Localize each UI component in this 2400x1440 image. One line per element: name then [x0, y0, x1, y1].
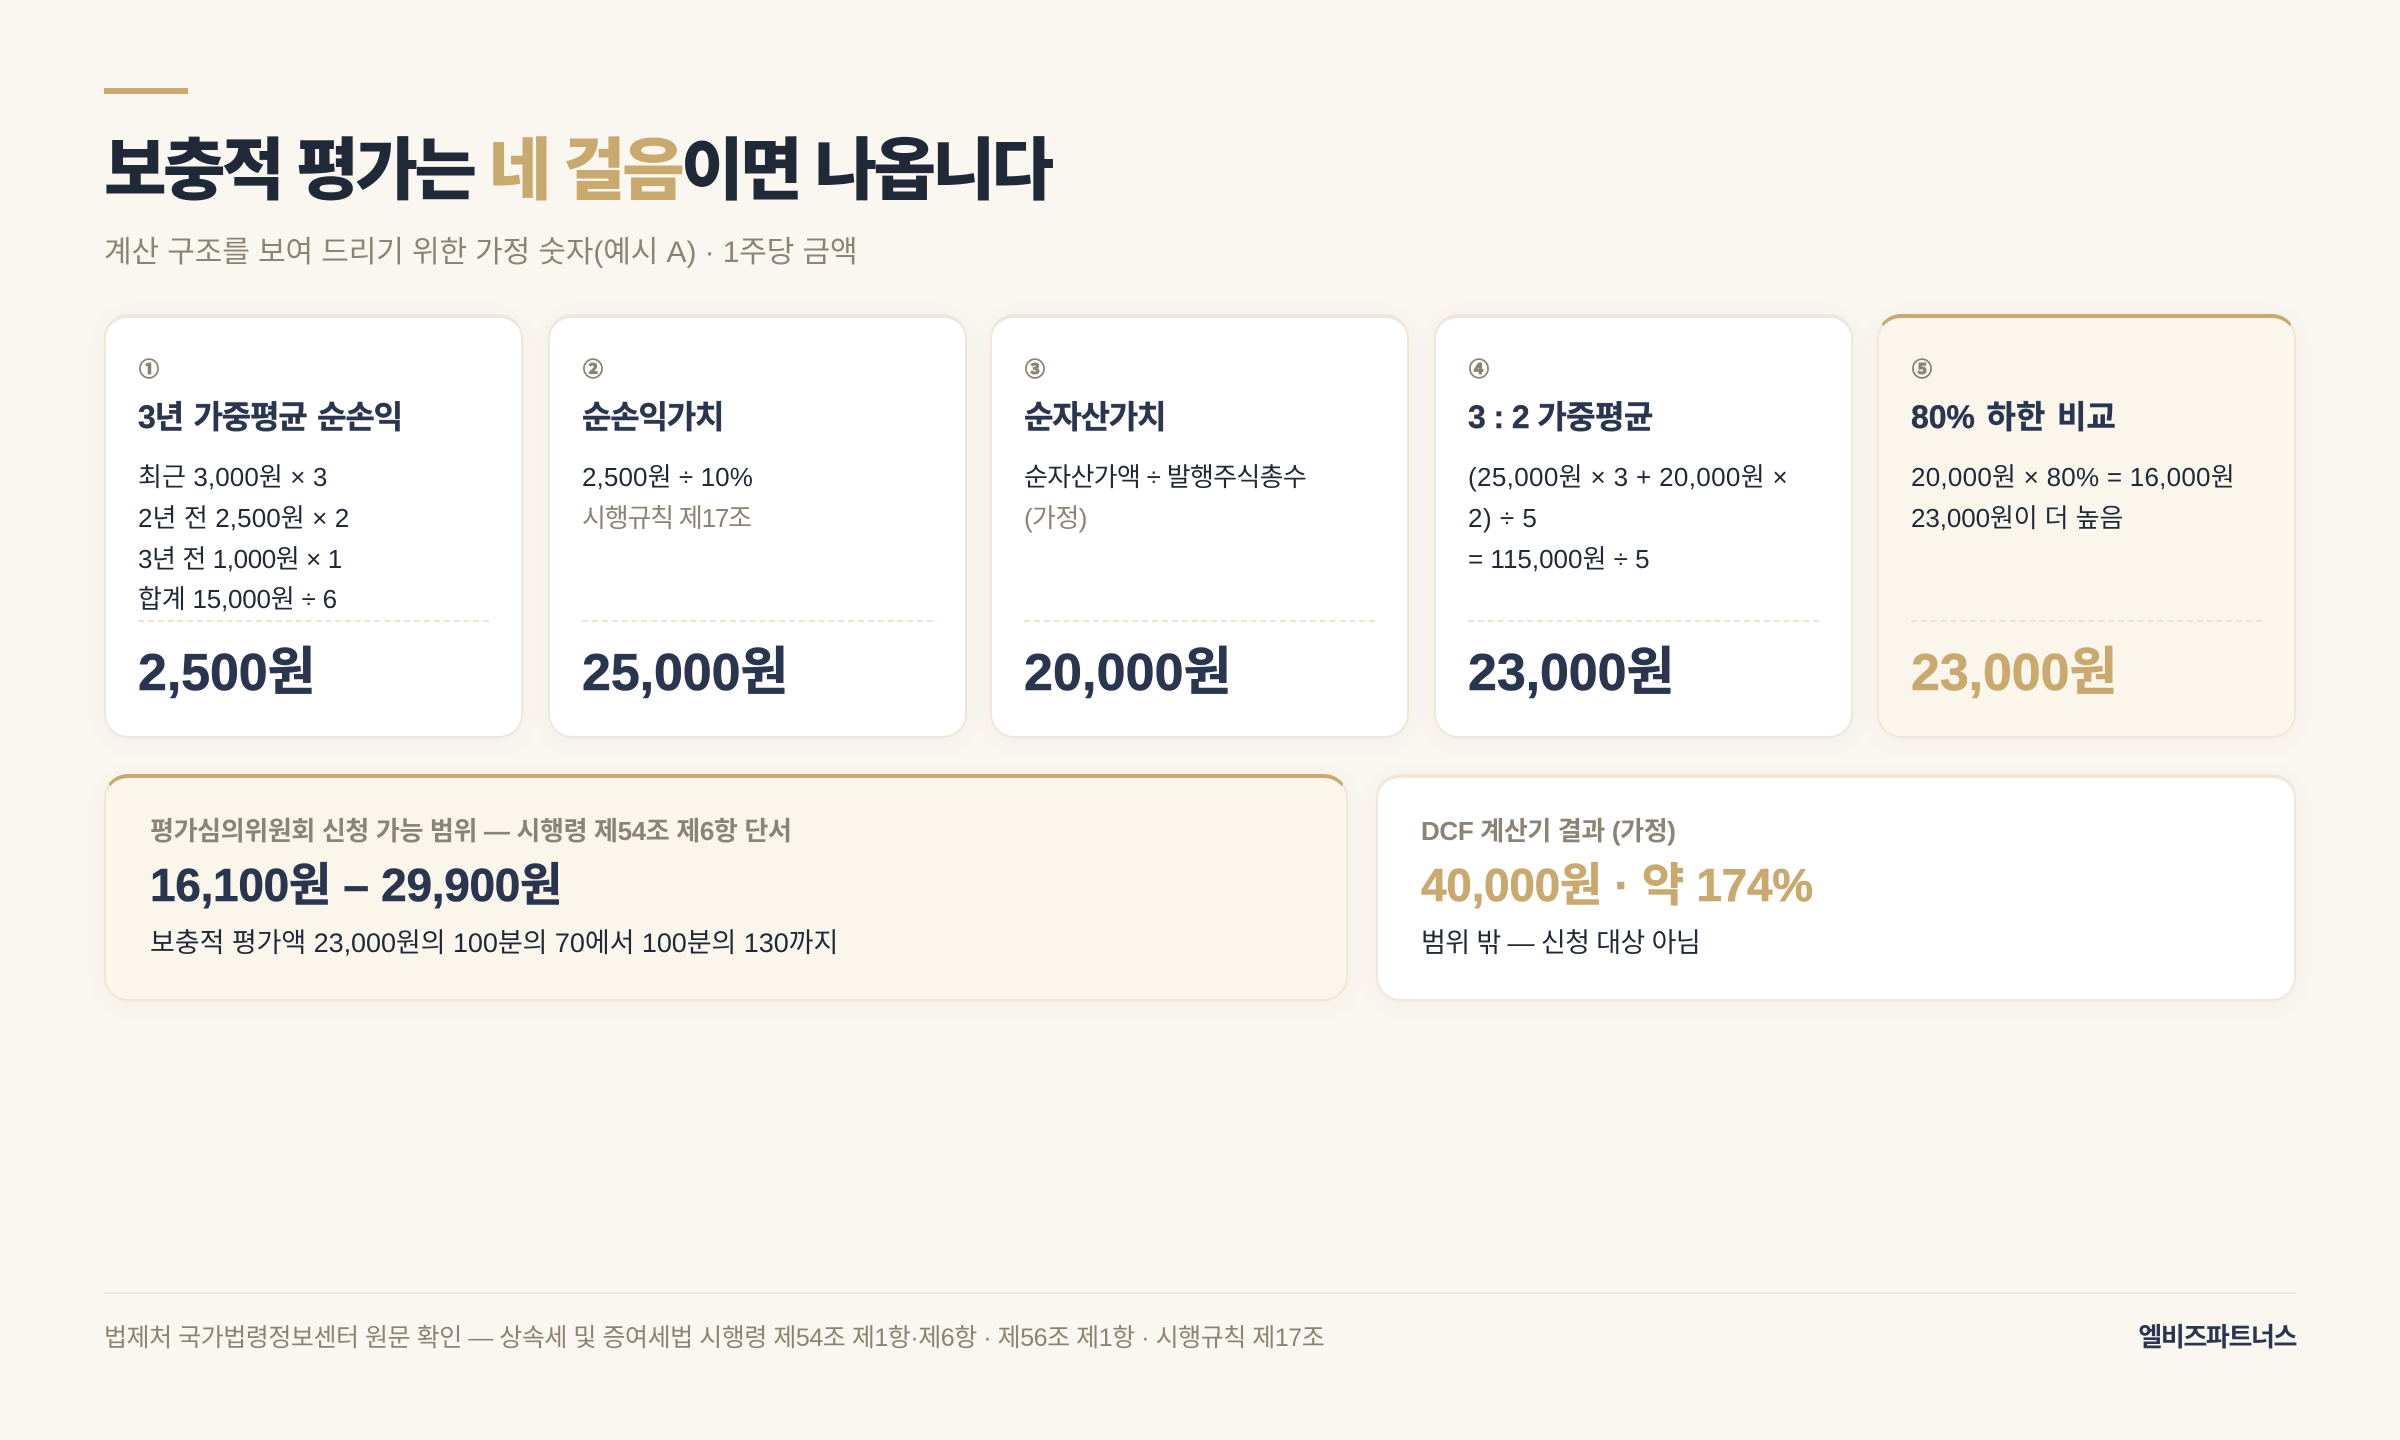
step 4 formula — [1468, 462, 1788, 574]
panel: DCF result — [1376, 774, 2296, 1001]
step 4 heading: 3 : 2 가중평균 — [1468, 399, 1653, 435]
step 3 result: 20,000원 — [1024, 644, 1232, 702]
step 2 result: 25,000원 — [582, 644, 788, 702]
range value: 16,100원 – 29,900원 — [150, 859, 562, 911]
step 5 heading: 80% 하한 비교 — [1911, 399, 2116, 435]
step 1 result: 2,500원 — [138, 644, 315, 702]
accent bar — [104, 88, 188, 94]
step number 1: ① — [139, 359, 159, 381]
panel: step 1 — [104, 314, 523, 738]
step 2 formula — [582, 462, 753, 533]
step 4 result: 23,000원 — [1468, 644, 1674, 702]
panel: step 2 — [548, 314, 967, 738]
panel: step 4 — [1434, 314, 1853, 738]
step 2 formula: 시행규칙 제17조 — [582, 503, 751, 533]
DCF value: 40,000원 · 약 174% — [1421, 859, 1813, 911]
step 2 formula: 2,500원 ÷ 10% — [582, 462, 753, 492]
step 1 formula — [138, 462, 349, 614]
step 3 heading: 순자산가치 — [1024, 399, 1165, 435]
step 4 formula: (25,000원 × 3 + 20,000원 × — [1468, 462, 1788, 492]
range description: 보충적 평가액 23,000원의 100분의 70에서 100분의 130까지 — [150, 928, 838, 958]
step 5 formula: 23,000원이 더 높음 — [1911, 503, 2123, 533]
step number 2: ② — [583, 359, 603, 381]
panel: step 5 — [1877, 314, 2296, 738]
step number 3: ③ — [1025, 359, 1045, 381]
step 1 formula: 최근 3,000원 × 3 — [138, 462, 327, 492]
step 1 formula: 합계 15,000원 ÷ 6 — [138, 584, 337, 614]
step 5 formula — [1911, 462, 2235, 533]
title: 보충적 평가는 네 걸음이면 나옵니다 — [104, 133, 1051, 209]
panel: step 3 — [990, 314, 1409, 738]
DCF description: 범위 밖 — 신청 대상 아님 — [1421, 928, 1700, 958]
step 4 formula: 2) ÷ 5 — [1468, 503, 1537, 533]
step 5 formula: 20,000원 × 80% = 16,000원 — [1911, 462, 2235, 492]
subtitle: 계산 구조를 보여 드리기 위한 가정 숫자(예시 A) · 1주당 금액 — [104, 236, 858, 269]
step 5 result: 23,000원 — [1911, 644, 2117, 702]
step 1 formula: 3년 전 1,000원 × 1 — [138, 544, 342, 574]
step 3 formula: (가정) — [1024, 503, 1087, 533]
footer brand: 엘비즈파트너스 — [2138, 1322, 2296, 1352]
panel: application range — [104, 774, 1348, 1001]
step 2 heading: 순손익가치 — [582, 399, 723, 435]
step number 5: ⑤ — [1912, 359, 1932, 381]
step 1 formula: 2년 전 2,500원 × 2 — [138, 503, 349, 533]
step 1 heading: 3년 가중평균 순손익 — [138, 399, 402, 435]
range label: 평가심의위원회 신청 가능 범위 — 시행령 제54조 제6항 단서 — [150, 816, 792, 846]
step number 4: ④ — [1469, 359, 1489, 381]
step 4 formula: = 115,000원 ÷ 5 — [1468, 544, 1650, 574]
step 3 formula — [1024, 462, 1306, 533]
step 3 formula: 순자산가액 ÷ 발행주식총수 — [1024, 462, 1306, 492]
DCF label: DCF 계산기 결과 (가정) — [1421, 816, 1676, 846]
footer source: 법제처 국가법령정보센터 원문 확인 — 상속세 및 증여세법 시행령 제54조 제1항·제6항 · 제56조 제1항 · 시행규칙 제17조 — [104, 1324, 1324, 1352]
